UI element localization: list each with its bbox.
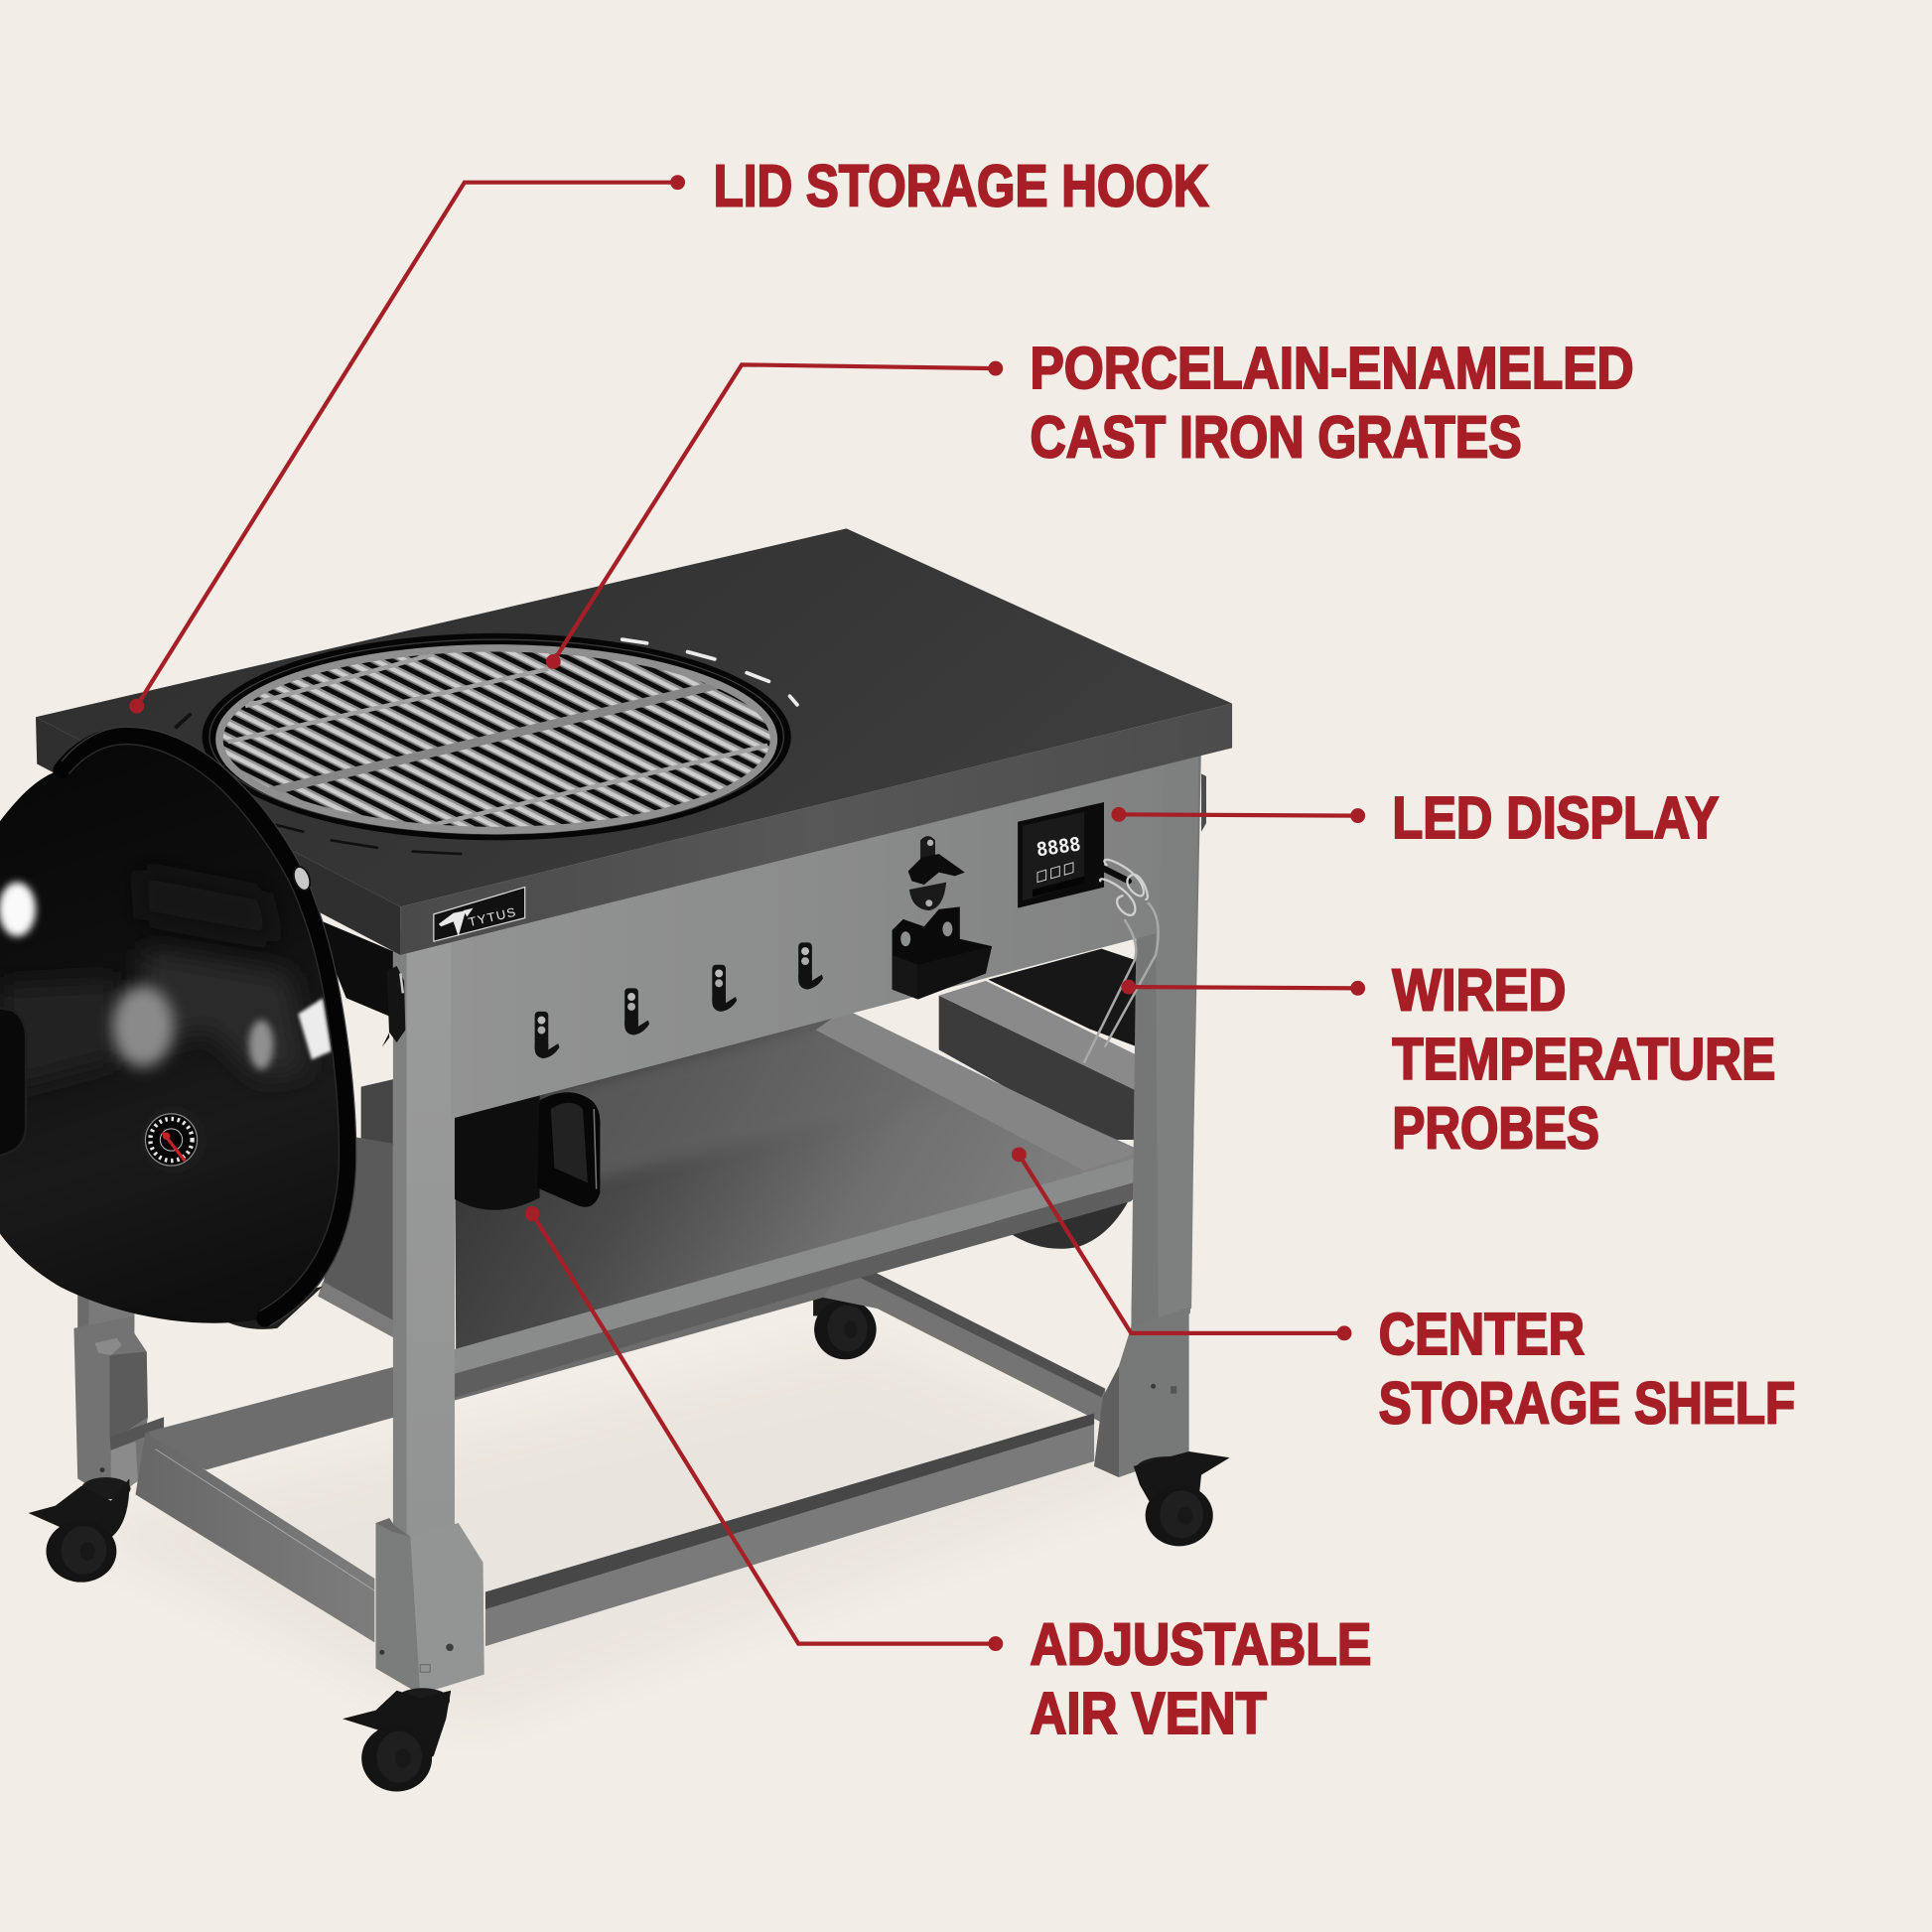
table front edge: [400, 704, 1232, 955]
callout: adjustable air vent: [525, 1206, 1371, 1746]
right leg: [1094, 742, 1201, 1477]
front left leg: [376, 930, 484, 1694]
rear caster: [813, 1294, 877, 1359]
callout: center storage shelf: STORAGE SHELF: [1379, 1369, 1795, 1436]
LED display: 8888: [1035, 833, 1082, 863]
rail: back: [148, 1247, 878, 1470]
table vent slots: [176, 639, 797, 854]
right storage bin and back band: [939, 949, 1139, 1140]
callout: wired temperature probes: PROBES: [1392, 1095, 1599, 1162]
cooking grate: [203, 633, 791, 840]
grill lid: [0, 727, 356, 1325]
callout: center storage shelf: [1012, 1147, 1795, 1436]
bottle opener: [908, 836, 965, 910]
callout: lid storage hook: [129, 152, 1208, 714]
right latch: [1201, 773, 1206, 832]
right leg sleeve: [1094, 1308, 1189, 1477]
front leg sleeve: [376, 1523, 484, 1694]
callout: LED display: LED DISPLAY: [1392, 784, 1719, 851]
shelf surface: [455, 1013, 1150, 1351]
grate bars: [222, 651, 770, 827]
callout: wired temperature probes: [1121, 957, 1775, 1162]
right caster: [1134, 1451, 1230, 1546]
floor shadow: [73, 1343, 1182, 1725]
callout: adjustable air vent: ADJUSTABLE: [1031, 1611, 1371, 1678]
lid handle: [0, 1008, 26, 1156]
bottle cap catcher: [893, 906, 992, 1000]
rail: left side: [136, 1432, 374, 1642]
LED display: [1018, 802, 1104, 908]
table surface: [36, 528, 1232, 906]
bottom frame rails: [136, 1247, 1105, 1646]
callout: adjustable air vent: AIR VENT: [1031, 1680, 1267, 1746]
table top: [36, 528, 1232, 955]
lid latch: [382, 966, 405, 1047]
lower bowl below the shelf: [986, 1185, 1136, 1249]
table left side: [36, 717, 400, 955]
rear left leg: [73, 1294, 164, 1499]
lid rim: [62, 736, 347, 1318]
grate cross rails: [209, 654, 788, 826]
callout: LED display: [1111, 784, 1719, 851]
callout: wired temperature probes: TEMPERATURE: [1392, 1026, 1775, 1092]
brand plate: TYTUS: [467, 904, 518, 929]
grate rim: [203, 633, 791, 840]
callout: porcelain-enameled cast iron grates: CAST IRON GRATES: [1031, 403, 1522, 470]
callout: center storage shelf: CENTER: [1379, 1301, 1585, 1367]
apron hooks: [535, 942, 823, 1058]
adjustable air vent cup: [452, 1092, 601, 1210]
callout: porcelain-enameled cast iron grates: [546, 335, 1634, 669]
grill bowl behind the table: [211, 918, 394, 1338]
shelf back rim: [816, 1009, 1140, 1171]
rail: right side: [823, 1261, 1105, 1425]
callout: wired temperature probes: WIRED: [1392, 957, 1566, 1024]
callout: lid storage hook: LID STORAGE HOOK: [714, 152, 1208, 218]
center storage shelf: [455, 1009, 1150, 1397]
callout: porcelain-enameled cast iron grates: PORCELAIN-ENAMELED: [1031, 335, 1634, 401]
lid hinge knob: [291, 865, 313, 893]
lid reflections: [0, 869, 332, 1090]
shelf front lip: [455, 1155, 1150, 1374]
grate ring: [218, 647, 775, 832]
rear left caster: [29, 1477, 131, 1583]
brand plate: [434, 888, 525, 941]
lid dome: [0, 736, 347, 1323]
rail: front: [485, 1414, 1094, 1646]
apron front panel: [451, 746, 1165, 1119]
front left caster: [343, 1688, 451, 1792]
lid thermometer: [140, 1106, 207, 1173]
wired temperature probes: [1084, 860, 1159, 1062]
